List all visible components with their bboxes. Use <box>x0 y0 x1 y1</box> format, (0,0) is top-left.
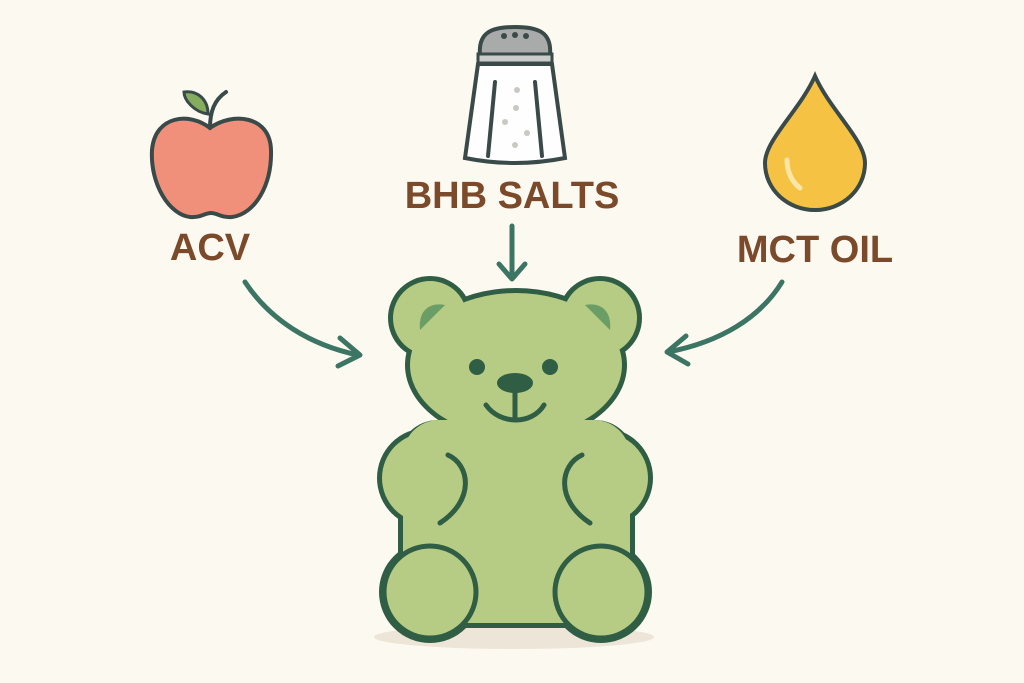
icon: salt shaker <box>465 27 565 163</box>
arrow: MCT to bear <box>667 282 782 364</box>
label: BHB SALTS: BHB SALTS <box>405 175 619 217</box>
bear <box>374 276 654 649</box>
arrow: ACV to bear <box>245 282 360 366</box>
icon: oil drop <box>765 76 865 210</box>
icon: apple <box>152 92 271 217</box>
label: ACV: ACV <box>170 227 251 269</box>
arrow: BHB to bear <box>499 226 525 279</box>
label: MCT OIL: MCT OIL <box>737 229 893 271</box>
